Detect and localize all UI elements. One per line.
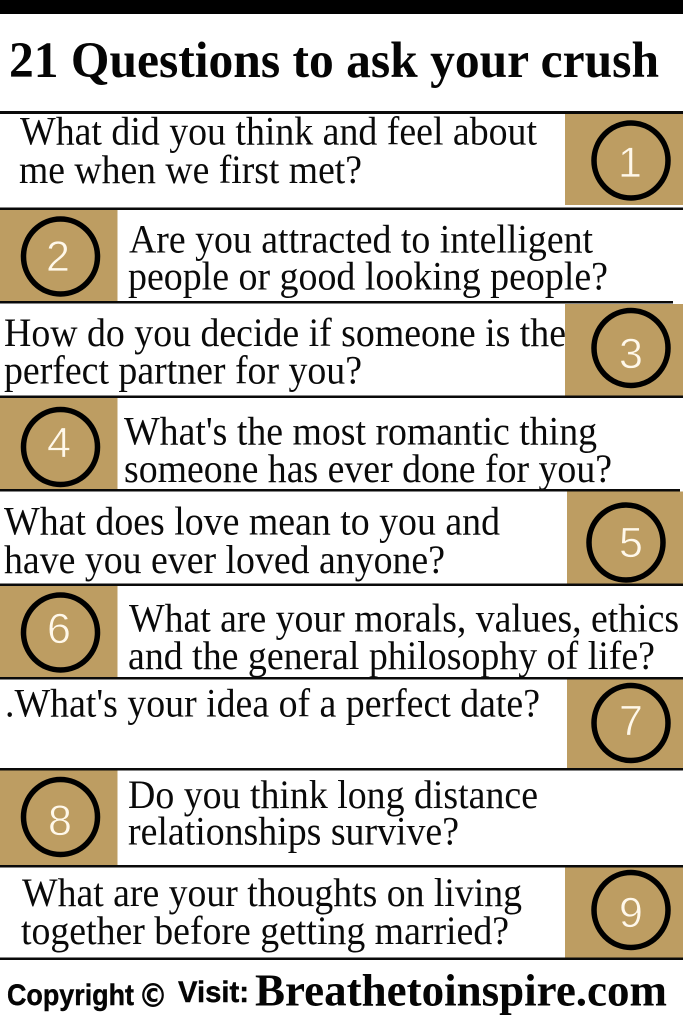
panel: question 2	[0, 210, 608, 301]
panel: question 5	[4, 492, 683, 584]
panel: question 3: perfect partner for you?	[4, 348, 362, 392]
panel: question 4: What's the most romantic thing	[124, 408, 597, 454]
footer: copyright and website: Visit:	[178, 976, 249, 1009]
footer: copyright and website	[7, 964, 667, 1016]
panel: question 7: .What's your idea of a perfect date?	[5, 680, 540, 726]
panel: question 1	[19, 108, 683, 205]
title: 21 Questions to ask your crush	[9, 33, 659, 89]
panel: question 5: have you ever loved anyone?	[4, 537, 445, 582]
panel: question 7	[5, 680, 683, 768]
panel: question 3: How do you decide if someone is the	[4, 310, 566, 355]
panel: question 9	[21, 868, 683, 958]
panel: question 4	[0, 398, 612, 491]
panel: question 8: relationships survive?	[128, 808, 459, 854]
panel: question 5: What does love mean to you and	[4, 498, 500, 544]
panel: question 7: 7	[619, 697, 643, 745]
panel: question 8: Do you think long distance	[128, 772, 538, 817]
panel: question 6	[0, 586, 679, 678]
panel: question 4: 4	[47, 419, 71, 467]
panel: question 2: 2	[46, 233, 70, 281]
footer: copyright and website: Copyright	[7, 979, 134, 1012]
panel: question 5: 5	[619, 519, 643, 567]
panel: question 1: 1	[618, 139, 642, 187]
panel: question 1: What did you think and feel about	[20, 108, 537, 154]
panel: question 2: people or good looking people?	[128, 254, 608, 298]
footer: copyright and website: ©	[138, 976, 168, 1015]
panel: question 6: 6	[47, 605, 71, 653]
panel: question 8	[0, 770, 538, 865]
panel: question 6: and the general philosophy of life?	[128, 633, 655, 678]
panel: question 3	[4, 304, 683, 396]
panel: question 9: together before getting married?	[21, 908, 509, 953]
panel: question 2: Are you attracted to intelligent	[129, 216, 593, 262]
panel: question 8: 8	[48, 797, 72, 845]
panel: question 9: 9	[619, 889, 643, 937]
footer: copyright and website: Breathetoinspire.com	[255, 964, 667, 1016]
panel: question 4: someone has ever done for you?	[124, 446, 612, 491]
panel: question 3: 3	[619, 330, 643, 378]
panel: question 9: What are your thoughts on living	[22, 870, 522, 915]
panel: question 1: me when we first met?	[19, 147, 362, 192]
